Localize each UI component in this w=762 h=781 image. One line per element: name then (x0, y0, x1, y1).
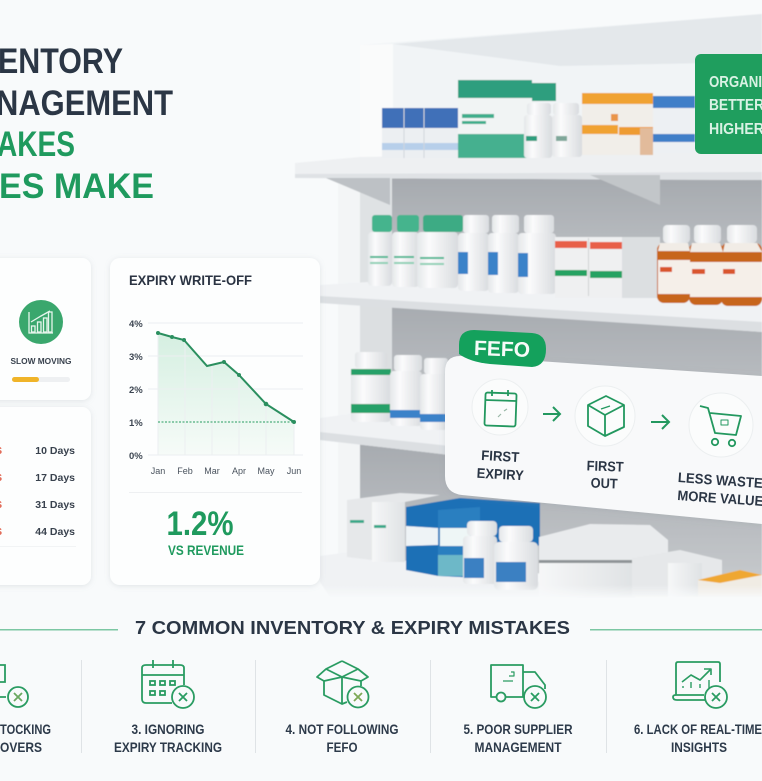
mistake 4 (286, 661, 399, 755)
upper back wall (360, 14, 762, 165)
y axis labels: 2% (129, 385, 143, 396)
x axis labels: Jan (151, 466, 165, 476)
products: bottom shelf blue boxes (406, 498, 540, 578)
products: top shelf green box (458, 80, 556, 158)
arrow two (651, 415, 669, 429)
icon: open box with x (317, 661, 368, 708)
step: first out: FIRST (586, 457, 624, 475)
FEFO panel (445, 330, 762, 524)
title: ENTORY (0, 42, 123, 81)
mistake 4: 4. NOT FOLLOWING (286, 721, 399, 737)
wall between shelves three and four (360, 440, 762, 590)
y axis labels: 0% (129, 451, 143, 462)
mistake 5 (464, 665, 572, 755)
step: first expiry: EXPIRY (476, 465, 525, 483)
products: top shelf blue box right (653, 96, 695, 154)
shelf one (295, 150, 762, 164)
chart heading: EXPIRY WRITE-OFF (129, 272, 252, 288)
step: less waste more value (677, 393, 762, 509)
title (0, 42, 173, 206)
title: ES MAKE (0, 167, 154, 206)
products: bottom shelf stacked boxes (539, 524, 762, 598)
products: top shelf orange boxes (582, 93, 653, 155)
x axis labels: Apr (232, 466, 246, 476)
FEFO badge (459, 330, 546, 367)
icon: delivery truck with x (491, 665, 546, 708)
panel: expiry write-off (110, 258, 320, 585)
panel: days table (0, 407, 91, 585)
mistake 2 (0, 665, 51, 755)
step: first expiry: FIRST (481, 447, 520, 465)
y axis labels: 1% (129, 418, 143, 429)
icon: slow moving chart (19, 300, 63, 344)
products: top shelf bottles (524, 103, 582, 158)
green sign (695, 54, 762, 154)
step: first out: OUT (590, 475, 618, 491)
x axis labels: Jun (287, 466, 301, 476)
x axis labels (151, 466, 301, 476)
panel: slow moving: SLOW MOVING (10, 356, 72, 366)
stat value: 1.2% (166, 505, 234, 543)
mistake 2: TOCKING (0, 721, 51, 737)
stat label: VS REVENUE (168, 542, 244, 558)
arrow one (543, 407, 560, 421)
shelving unit photo (295, 14, 762, 599)
column dividers (81, 660, 607, 753)
row days values: 31 Days (35, 499, 75, 511)
mistake 3 (114, 660, 222, 755)
y axis labels (129, 319, 143, 462)
title: NAGEMENT (0, 84, 173, 123)
row red values (0, 446, 2, 538)
mistake 3: EXPIRY TRACKING (114, 739, 222, 755)
y axis labels: 3% (129, 352, 143, 363)
products: green cap bottles (368, 215, 463, 288)
mistake 5: MANAGEMENT (474, 739, 562, 755)
shelf three (320, 414, 450, 455)
FEFO badge: FEFO (474, 337, 530, 362)
mistake 2: OVERS (0, 739, 42, 755)
panel: slow moving (0, 258, 91, 400)
icon: calendar with x (142, 660, 194, 708)
icon: box with x (0, 665, 28, 707)
row days values: 10 Days (35, 445, 75, 457)
mistake 6 (634, 662, 762, 755)
products: red and green boxes (555, 237, 660, 298)
products: bottom shelf white boxes (347, 493, 440, 562)
step: first out (575, 386, 635, 491)
row days values (35, 445, 75, 538)
page fade below photo (320, 585, 762, 599)
mistake 4: FEFO (326, 739, 358, 755)
wall between shelves two and three (360, 300, 762, 450)
mistake 5: 5. POOR SUPPLIER (464, 721, 572, 737)
products: amber bottles (657, 225, 762, 306)
icon: analytics screen with x (673, 662, 727, 708)
x axis labels: Mar (204, 466, 220, 476)
mistake 6: INSIGHTS (671, 739, 727, 755)
wall between shelves one and two (360, 178, 762, 305)
x axis labels: Feb (177, 466, 193, 476)
section heading: 7 COMMON INVENTORY & EXPIRY MISTAKES (135, 618, 570, 638)
step: first expiry (472, 379, 528, 483)
products: third shelf bottles (351, 352, 448, 430)
shelf four (320, 552, 560, 597)
y axis labels: 4% (129, 319, 143, 330)
shelf two (320, 280, 762, 332)
row days values: 44 Days (35, 526, 75, 538)
row days values: 17 Days (35, 472, 75, 484)
mistake 3: 3. IGNORING (132, 721, 205, 737)
products: blue label bottles (458, 215, 556, 294)
products: bottom shelf bottles (463, 521, 538, 590)
side panel (338, 178, 360, 578)
line chart (129, 319, 303, 476)
products: top shelf blue boxes (382, 108, 458, 158)
progress bar (12, 377, 70, 382)
x axis labels: May (257, 466, 275, 476)
